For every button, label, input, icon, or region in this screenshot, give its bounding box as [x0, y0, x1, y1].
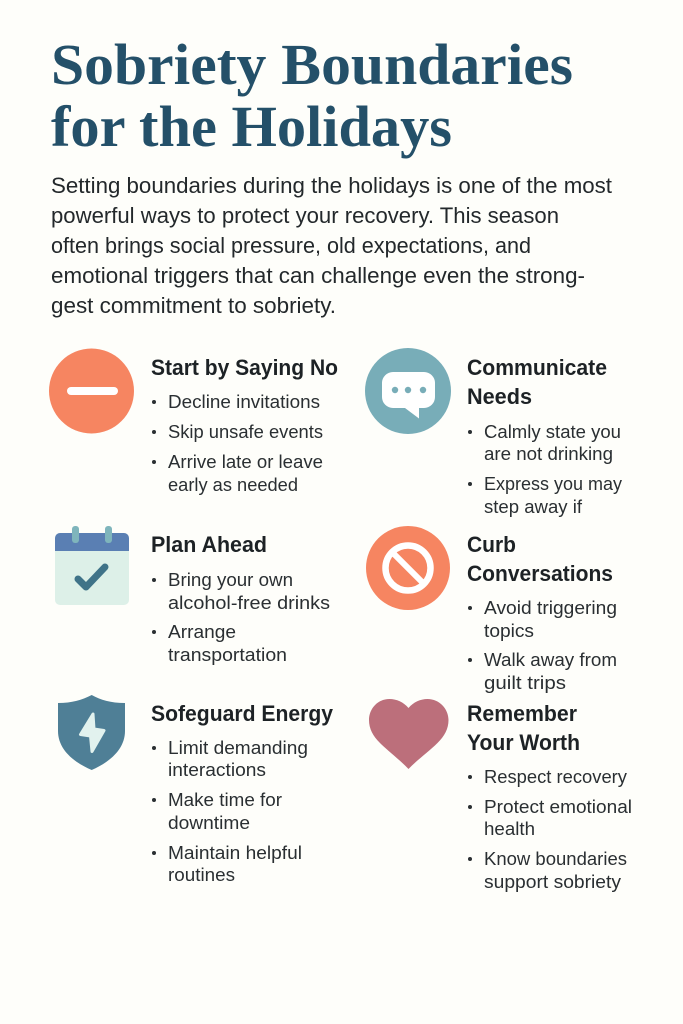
bullet list: remember your worth: health: [484, 818, 535, 839]
heading: start by saying no: Start by Saying No: [151, 355, 338, 380]
bullet list: curb conversations: [468, 597, 617, 693]
icon: speech bubble: [365, 348, 451, 434]
icon: heart: [369, 699, 448, 769]
intro paragraph: often brings social pressure, old expectations, and: [51, 233, 531, 258]
bullet list: plan ahead: transportation: [168, 644, 287, 665]
bullet list: curb conversations: Walk away from: [484, 649, 617, 670]
bullet list: start by saying no: Arrive late or leave: [168, 451, 323, 472]
heading: remember your worth: [467, 701, 580, 755]
bullet list: remember your worth: support sobriety: [484, 871, 622, 892]
bullet list: curb conversations: guilt trips: [484, 672, 566, 693]
intro paragraph: gest commitment to sobriety.: [51, 293, 336, 318]
icon: shield with bolt: [58, 695, 125, 770]
heading: plan ahead: Plan Ahead: [151, 532, 267, 557]
icon: prohibition sign: [366, 526, 450, 610]
bullet list: remember your worth: Know boundaries: [484, 848, 627, 869]
bullet list: plan ahead: alcohol-free drinks: [168, 592, 330, 613]
heading: curb conversations: [467, 532, 613, 586]
heading: curb conversations: Conversations: [467, 561, 613, 586]
title: Sobriety Boundaries: [51, 32, 573, 97]
bullet list: safeguard energy: Maintain helpful: [168, 842, 302, 863]
bullet list: start by saying no: early as needed: [168, 474, 298, 495]
bullet list: remember your worth: Respect recovery: [484, 766, 628, 787]
bullet list: safeguard energy: [152, 737, 308, 885]
bullet list: start by saying no: Decline invitations: [168, 391, 320, 412]
intro paragraph: Setting boundaries during the holidays is one of the most: [51, 173, 612, 198]
panel: start by saying no: [49, 348, 338, 495]
intro paragraph: powerful ways to protect your recovery. This season: [51, 203, 559, 228]
heading: communicate needs: [467, 355, 607, 409]
bullet list: plan ahead: Arrange: [168, 621, 236, 642]
bullet list: safeguard energy: interactions: [168, 759, 266, 780]
panel: plan ahead: [55, 526, 330, 665]
icon: calendar: [55, 526, 129, 605]
bullet list: safeguard energy: downtime: [168, 812, 250, 833]
panel: communicate needs: [365, 348, 623, 517]
bullet list: start by saying no: [152, 391, 323, 495]
heading: remember your worth: Remember: [467, 701, 577, 726]
heading: safeguard energy: Sofeguard Energy: [151, 701, 334, 726]
intro paragraph: [51, 173, 612, 318]
bullet list: remember your worth: [468, 766, 632, 892]
bullet list: communicate needs: Calmly state you: [484, 421, 621, 442]
bullet list: safeguard energy: Make time for: [168, 789, 282, 810]
bullet list: plan ahead: Bring your own: [168, 569, 293, 590]
bullet list: safeguard energy: routines: [168, 864, 235, 885]
heading: remember your worth: Your Worth: [467, 730, 580, 755]
bullet list: safeguard energy: Limit demanding: [168, 737, 308, 758]
panel: curb conversations: [366, 526, 617, 693]
bullet list: communicate needs: Express you may: [484, 473, 623, 494]
bullet list: start by saying no: Skip unsafe events: [168, 421, 323, 442]
bullet list: plan ahead: [152, 569, 330, 665]
bullet list: communicate needs: step away if: [484, 496, 583, 517]
bullet list: curb conversations: Avoid triggering: [484, 597, 617, 618]
panel: remember your worth: [369, 699, 632, 892]
bullet list: communicate needs: [468, 421, 623, 517]
title: for the Holidays: [51, 94, 452, 159]
title: [51, 32, 573, 159]
icon: minus circle: [49, 348, 134, 434]
heading: communicate needs: Communicate: [467, 355, 607, 380]
bullet list: curb conversations: topics: [484, 620, 534, 641]
intro paragraph: emotional triggers that can challenge even the strong-: [51, 263, 585, 288]
panel: safeguard energy: [58, 695, 334, 885]
bullet list: communicate needs: are not drinking: [484, 443, 613, 464]
heading: communicate needs: Needs: [467, 384, 532, 409]
bullet list: remember your worth: Protect emotional: [484, 796, 632, 817]
heading: curb conversations: Curb: [467, 532, 516, 557]
